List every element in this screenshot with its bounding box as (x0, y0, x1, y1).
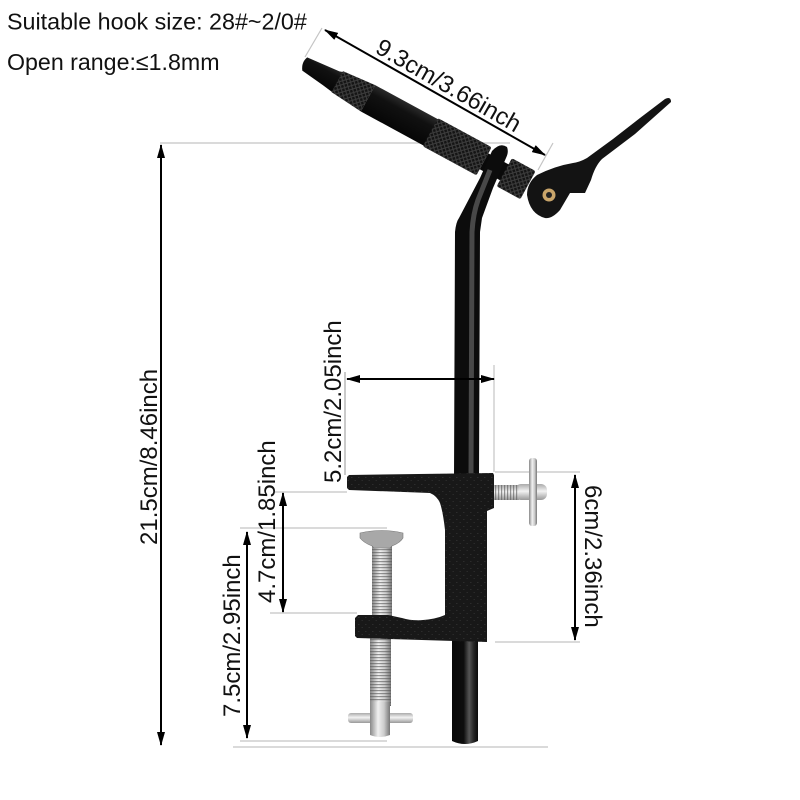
lower screw lower thread (370, 638, 391, 706)
collar (480, 153, 511, 182)
label: 9.3cm/3.66inch (371, 34, 526, 138)
lower screw head (360, 530, 403, 548)
lower screw smooth end (370, 702, 390, 737)
vertical stem lower (452, 640, 478, 744)
barrel tip (297, 52, 346, 94)
arrow (325, 30, 545, 155)
label: 21.5cm/8.46inch (136, 369, 163, 545)
side screw T bar (529, 458, 537, 526)
lever pivot brass ring (542, 188, 556, 202)
lower screw T bar (348, 713, 413, 723)
arrow (160, 145, 162, 745)
rotary handle barrel (295, 49, 536, 199)
arrow (347, 378, 494, 380)
fly tying vise product photo (295, 49, 671, 744)
stem highlight (471, 170, 490, 477)
lower screw upper thread (372, 545, 392, 617)
clamp lower screw (348, 530, 413, 737)
upper stem with bend and loop (454, 145, 508, 477)
label: 6cm/2.36inch (579, 485, 606, 628)
barrel shaft (361, 85, 438, 146)
rear knurl (423, 118, 492, 175)
label: 4.7cm/1.85inch (254, 440, 281, 603)
clamp body (347, 473, 494, 642)
spec text: open range: Open range:≤1.8mm (7, 49, 220, 75)
arrow (282, 493, 284, 612)
side screw shaft (515, 484, 547, 500)
front knurl (330, 68, 375, 111)
spec text: hook size: Suitable hook size: 28#~2/0# (7, 8, 307, 34)
label: 7.5cm/2.95inch (219, 554, 246, 717)
dimension: handle length (325, 30, 545, 155)
label: 5.2cm/2.05inch (320, 320, 347, 483)
end knurl (497, 158, 536, 199)
arrow (574, 475, 576, 640)
side screw thread (493, 485, 519, 500)
stem silhouette (454, 145, 508, 477)
arrow (246, 532, 248, 738)
lever arm (527, 98, 671, 218)
clamp side screw (493, 458, 547, 526)
